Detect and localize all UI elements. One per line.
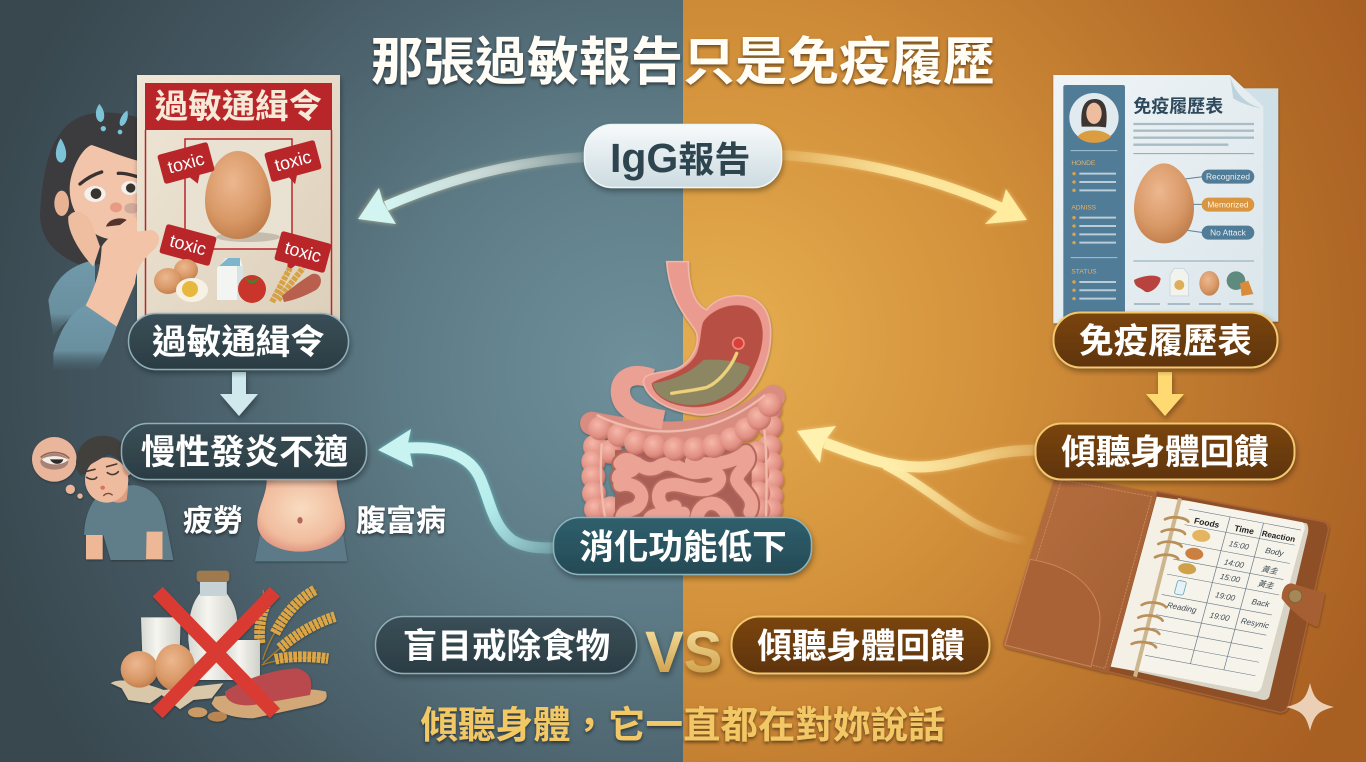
arrow: wanted poster to inflammation [220, 372, 258, 416]
sidebar [1063, 85, 1125, 318]
handwritten entries: 19:00 [1209, 611, 1231, 623]
back sheet [1233, 88, 1278, 322]
right page with table: Foods [1193, 516, 1221, 530]
pill: allergy wanted notice: 過敏通緝令 [152, 324, 325, 362]
small glass [225, 640, 260, 680]
arrow: IgG to immune resume [782, 155, 1027, 224]
icon: steak [1134, 276, 1161, 292]
back cover [1108, 492, 1328, 712]
IgG report pill: IgG報告 [610, 135, 750, 181]
leather notebook [1003, 475, 1328, 712]
icon: worried woman [40, 104, 147, 337]
pill: digestive decline [554, 518, 812, 574]
handwritten entries: 14:00 [1223, 558, 1246, 570]
icon: eliminated foods [111, 571, 335, 722]
eggs [121, 651, 158, 688]
handwritten entries: 15:00 [1219, 572, 1242, 585]
pill: listen to body comparison [732, 616, 990, 674]
background: right half [683, 0, 1366, 762]
wheat [258, 590, 335, 665]
arrow: listening to body to digestion [797, 426, 1036, 542]
avatar [1069, 93, 1119, 143]
man's arms [86, 528, 163, 559]
icon: bloated belly [255, 480, 347, 561]
stomach contents [653, 360, 750, 405]
man's neck [103, 485, 128, 503]
handwritten entries: 黃圭 [1256, 579, 1275, 591]
label: bloating: 腹富病 [356, 505, 446, 538]
meat [225, 668, 311, 705]
stomach cavity [652, 305, 763, 407]
right page with table: Time [1233, 523, 1255, 536]
toxic tag 3 [157, 224, 217, 274]
handwritten entries [1165, 531, 1289, 630]
handwritten entries: Back [1251, 597, 1271, 609]
immune resume document [1053, 75, 1278, 323]
poster header text: 過敏通緝令 [155, 89, 322, 126]
pill: listen to body: 傾聽身體回饋 [1061, 434, 1269, 472]
icon: stomach and intestines [581, 262, 784, 522]
page curl [1230, 75, 1262, 108]
colon top [588, 393, 782, 461]
pill: listen to body [1036, 424, 1294, 480]
pill: listen to body comparison: 傾聽身體回饋 [757, 628, 965, 666]
tag: No Attack [1202, 226, 1254, 240]
man's t-shirt [84, 485, 173, 560]
icon: sweat drops [56, 104, 128, 163]
icon: resume egg [1134, 163, 1194, 243]
front flap [1003, 475, 1157, 673]
right page with table: Reaction [1261, 529, 1296, 544]
icon: small egg [1199, 271, 1219, 296]
pill: blind elimination [376, 616, 636, 674]
tag: Recognized [1202, 170, 1254, 184]
label: fatigue: 疲勞 [183, 505, 243, 538]
toxic tag 4 [272, 231, 332, 281]
resume text lines [1133, 124, 1254, 145]
toxic tag 2: toxic [273, 147, 313, 175]
binder spine and rings [1132, 498, 1188, 677]
acid streak [672, 353, 737, 393]
icon: egg [205, 151, 271, 239]
egg shadow [216, 232, 280, 242]
tomato [238, 275, 266, 303]
toxic tag 1 [157, 142, 217, 192]
almonds [188, 707, 207, 717]
handwritten entries: 19:00 [1214, 590, 1237, 603]
pocket [1005, 559, 1100, 667]
resume title: 免疫履歷表 [1133, 95, 1223, 116]
pill: chronic inflammation [122, 424, 366, 480]
handwritten entries: Body [1264, 546, 1285, 558]
VS label: VS [645, 620, 722, 685]
tag: Memorized: Memorized [1207, 199, 1249, 209]
bottom tagline: 傾聽身體，它一直都在對妳說話 [420, 704, 946, 746]
arrow: resume to listening [1146, 372, 1184, 416]
red frame [185, 139, 292, 249]
handwritten entries: Resynic [1240, 617, 1270, 630]
handwritten entries: 黃圭 [1260, 565, 1279, 576]
icon: mixed food [1227, 271, 1253, 296]
food icons [1171, 527, 1212, 597]
meat board [212, 689, 327, 718]
toxic tag 3: toxic [168, 231, 208, 259]
stomach wall [643, 262, 771, 415]
icon: tired man [32, 436, 173, 560]
pill: allergy wanted notice [128, 314, 348, 370]
small intestine [615, 450, 752, 522]
ulcer [733, 338, 744, 349]
wheat and meat [272, 268, 321, 302]
handwritten entries: 15:00 [1228, 539, 1250, 552]
man's face [85, 457, 128, 503]
glass of milk [141, 617, 181, 665]
sidebar labels: HONDE [1071, 160, 1096, 167]
handwritten entries: Reading [1166, 601, 1198, 615]
icon: woman's hand holding poster [53, 217, 159, 370]
right page with table [1137, 500, 1306, 693]
icon: sparkle [1286, 683, 1334, 731]
tag: No Attack: No Attack [1210, 227, 1247, 237]
pill: digestive decline: 消化功能低下 [579, 529, 787, 567]
connector lines [1185, 177, 1203, 233]
IgG report pill [584, 124, 782, 188]
wanted poster [137, 75, 340, 325]
egg tray [111, 681, 223, 709]
duodenum [620, 376, 663, 420]
toxic tag 2 [264, 140, 324, 190]
colon sides [581, 398, 784, 522]
eggs on poster [154, 259, 208, 302]
sidebar: ADNISS [1071, 204, 1097, 211]
arrow: digestion to chronic inflammation [378, 429, 553, 548]
milk bottle [188, 571, 238, 680]
cheek fingers [68, 212, 100, 267]
tag: Recognized: Recognized [1206, 172, 1250, 182]
milk carton [217, 258, 243, 300]
poster header [145, 83, 332, 130]
sidebar bullet rows [1072, 172, 1116, 300]
toxic tag 4: toxic [283, 238, 323, 266]
red cross [158, 592, 275, 713]
toxic tag 1: toxic [166, 149, 206, 177]
pill: immune resume: 免疫履歷表 [1079, 323, 1252, 361]
main sheet [1053, 75, 1263, 323]
man's hair [76, 436, 126, 475]
title: 那張過敏報告只是免疫履歷 [371, 34, 995, 92]
background: left half [0, 0, 683, 762]
page block [1137, 501, 1308, 700]
tag: Memorized [1202, 198, 1254, 212]
left page sliver [1111, 497, 1185, 672]
pill: immune resume [1054, 312, 1278, 368]
tired eye thought bubble [32, 437, 83, 499]
sidebar: STATUS [1071, 268, 1097, 275]
icon: milk box [1170, 269, 1189, 296]
arrow: IgG to wanted poster [358, 157, 585, 224]
clasp [1282, 583, 1325, 627]
pill: chronic inflammation: 慢性發炎不適 [141, 434, 348, 472]
pill: blind elimination: 盲目戒除食物 [403, 628, 610, 666]
